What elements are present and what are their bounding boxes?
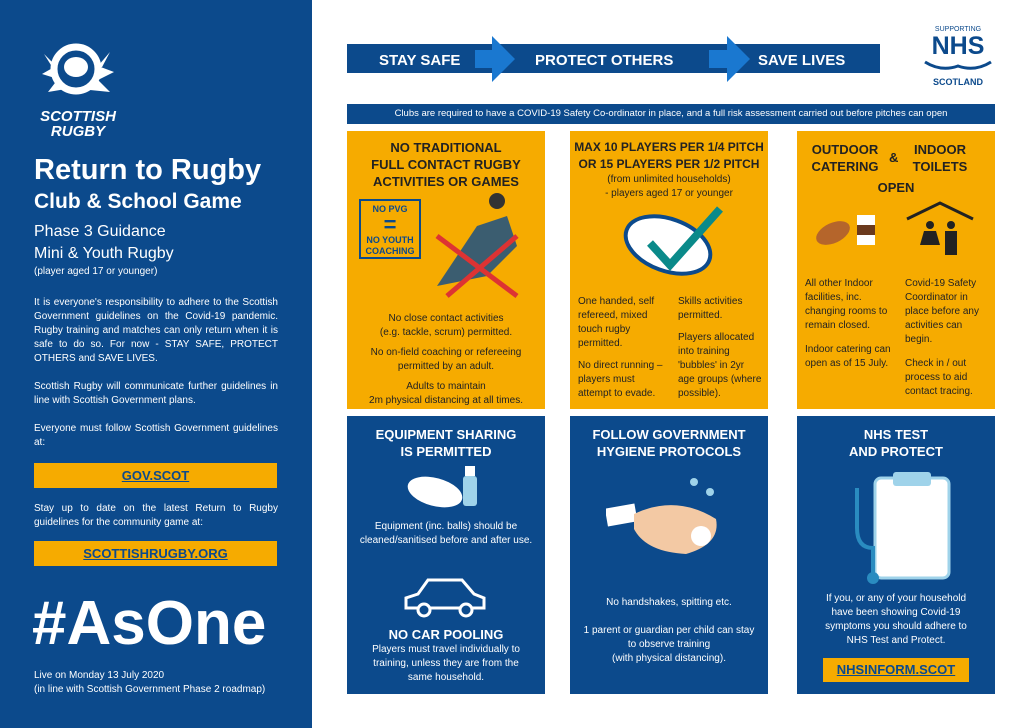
panel: hygiene: No handshakes, spitting etc. 1 parent or guardian per child can stay bbox=[584, 597, 754, 636]
NHS logo: SCOTLAND bbox=[933, 77, 983, 87]
panel: no contact: No close contact activities bbox=[388, 313, 504, 324]
banner arrows bbox=[347, 36, 880, 82]
logo: scottish rugby: SCOTTISH bbox=[40, 108, 116, 125]
banner arrows: SAVE LIVES bbox=[758, 52, 845, 69]
panel: hygiene: (with physical distancing). bbox=[612, 653, 726, 664]
panel: equipment bbox=[347, 416, 545, 694]
panel: equipment: Equipment (inc. balls) should be bbox=[375, 521, 517, 532]
panel: max players: - players aged 17 or younger bbox=[605, 188, 733, 199]
icon: hotdog and cup bbox=[816, 215, 875, 245]
link: gov.scot: GOV.SCOT bbox=[122, 468, 189, 483]
panel: hygiene: FOLLOW GOVERNMENT bbox=[592, 427, 746, 442]
intro text bbox=[34, 297, 278, 448]
icon: spray and ball bbox=[408, 466, 477, 508]
icon: no PVG box bbox=[359, 199, 421, 259]
panel: NHS test and protect: symptoms you should adhere to bbox=[825, 621, 967, 632]
logo: scottish rugby bbox=[40, 44, 116, 140]
panel: no contact bbox=[347, 131, 545, 409]
panel: equipment: cleaned/sanitised before and after use. bbox=[360, 535, 532, 546]
left panel bbox=[0, 0, 312, 728]
panel: NHS test and protect: have been showing Covid-19 bbox=[832, 607, 960, 618]
icon: car bbox=[404, 578, 486, 618]
panel: catering & toilets: TOILETS bbox=[913, 159, 967, 174]
info bar bbox=[347, 104, 995, 124]
panel: max players: One handed, self refereed, mixed touch rugby permitted. No direct running – players must attempt to evade. bbox=[578, 296, 662, 399]
banner arrows: PROTECT OTHERS bbox=[535, 52, 673, 69]
panel: NHS test and protect: NHS TEST bbox=[864, 427, 928, 442]
panel: catering & toilets: OPEN bbox=[878, 180, 914, 195]
panel: catering & toilets: All other Indoor facilities, inc. changing rooms to remain closed. Indoor catering can open as of 15 July. bbox=[805, 278, 891, 369]
logo: scottish rugby: RUGBY bbox=[51, 123, 105, 140]
link: nhsinform: NHSINFORM.SCOT bbox=[837, 662, 955, 677]
panel: equipment: Players must travel individually to bbox=[372, 644, 520, 655]
link: scottishrugby.org bbox=[34, 541, 277, 566]
panel: no contact: No on-field coaching or refereeing bbox=[371, 347, 521, 358]
title bbox=[34, 154, 261, 277]
panel: max players: MAX 10 PLAYERS PER 1/4 PITCH bbox=[574, 140, 764, 154]
link: gov.scot bbox=[34, 463, 277, 488]
panel: hygiene: to observe training bbox=[628, 639, 710, 650]
panel: catering & toilets: OUTDOOR bbox=[812, 142, 878, 157]
icon: washing hands bbox=[606, 478, 717, 554]
icon: clipboard and stethoscope bbox=[855, 472, 950, 584]
panel: max players: Skills activities permitted. Players allocated into training 'bubbles' in 2yr age groups (where possible). bbox=[678, 296, 761, 399]
intro text: Everyone must follow Scottish Government guidelines at: bbox=[34, 423, 278, 448]
live date: Live on Monday 13 July 2020 bbox=[34, 670, 164, 681]
panel: equipment: NO CAR POOLING bbox=[389, 627, 503, 642]
panel: no contact: permitted by an adult. Adults to maintain bbox=[398, 361, 494, 392]
panel: equipment: EQUIPMENT SHARING bbox=[376, 427, 516, 442]
NHS logo: NHS bbox=[932, 32, 984, 60]
panel: equipment: same household. bbox=[408, 672, 484, 683]
panel: NHS test and protect: NHS Test and Protect. bbox=[847, 635, 945, 646]
icon: ball with tick bbox=[624, 206, 723, 276]
panel: catering & toilets: INDOOR bbox=[914, 142, 966, 157]
panel: max players: OR 15 PLAYERS PER 1/2 PITCH bbox=[579, 157, 759, 171]
NHS logo: SUPPORTING bbox=[935, 26, 981, 33]
panel: no contact: NO TRADITIONAL bbox=[390, 140, 502, 155]
panel: equipment: IS PERMITTED bbox=[400, 444, 492, 459]
banner arrows: STAY SAFE bbox=[379, 52, 460, 69]
panel: no contact: FULL CONTACT RUGBY bbox=[371, 157, 521, 172]
panel: catering & toilets: CATERING bbox=[812, 159, 878, 174]
title: Phase 3 Guidance bbox=[34, 223, 166, 240]
title: Club & School Game bbox=[34, 190, 242, 213]
intro text: Scottish Rugby will communicate further guidelines in line with Scottish Government plans. bbox=[34, 381, 278, 406]
panel: max players: (from unlimited households) bbox=[607, 174, 731, 185]
intro text: It is everyone's responsibility to adhere to the Scottish Government guidelines on the Covid-19 pandemic. Rugby training and matches can only return when it is safe to do so. For now - STAY SAFE, PROTECT OTHERS and SAVE LIVES. bbox=[34, 297, 278, 364]
title: (player aged 17 or younger) bbox=[34, 266, 157, 277]
panel: NHS test and protect: AND PROTECT bbox=[849, 444, 943, 459]
panel: catering & toilets: Covid-19 Safety Coordinator in place before any activities can begin. Check in / out process to aid contact tracing. bbox=[905, 278, 979, 397]
panel: no contact: 2m physical distancing at all times. bbox=[369, 395, 523, 406]
panel: catering & toilets bbox=[797, 131, 995, 409]
live date bbox=[34, 670, 265, 695]
title: Return to Rugby bbox=[34, 154, 261, 186]
title: Mini & Youth Rugby bbox=[34, 245, 174, 262]
panel: hygiene: HYGIENE PROTOCOLS bbox=[597, 444, 741, 459]
panel: hygiene bbox=[570, 416, 768, 694]
live date: (in line with Scottish Government Phase 2 roadmap) bbox=[34, 684, 265, 695]
panel: catering & toilets: & bbox=[889, 150, 898, 165]
panel: max players bbox=[570, 131, 768, 409]
panel: NHS test and protect: If you, or any of your household bbox=[826, 593, 966, 604]
panel: no contact: (e.g. tackle, scrum) permitted. bbox=[380, 327, 512, 338]
icon: tackle crossed bbox=[436, 193, 518, 298]
info bar: Clubs are required to have a COVID-19 Safety Co-ordinator in place, and a full risk assessment carried out before pitches can open bbox=[395, 108, 947, 119]
icon: no PVG box: NO PVG NO YOUTH COACHING bbox=[366, 204, 414, 256]
link: scottishrugby.org: SCOTTISHRUGBY.ORG bbox=[83, 546, 228, 561]
panel: no contact: ACTIVITIES OR GAMES bbox=[373, 174, 519, 189]
icon: toilet figures bbox=[906, 201, 974, 255]
link: nhsinform bbox=[823, 658, 969, 682]
hashtag: #AsOne bbox=[32, 589, 266, 658]
NHS logo bbox=[924, 26, 992, 87]
text: stay up to date: Stay up to date on the latest Return to Rugby guidelines for the community game at: bbox=[34, 503, 278, 528]
icon: no PVG box: = bbox=[384, 212, 396, 237]
panel: NHS test and protect bbox=[797, 416, 995, 694]
panel: equipment: training, unless they are from the bbox=[373, 658, 519, 669]
